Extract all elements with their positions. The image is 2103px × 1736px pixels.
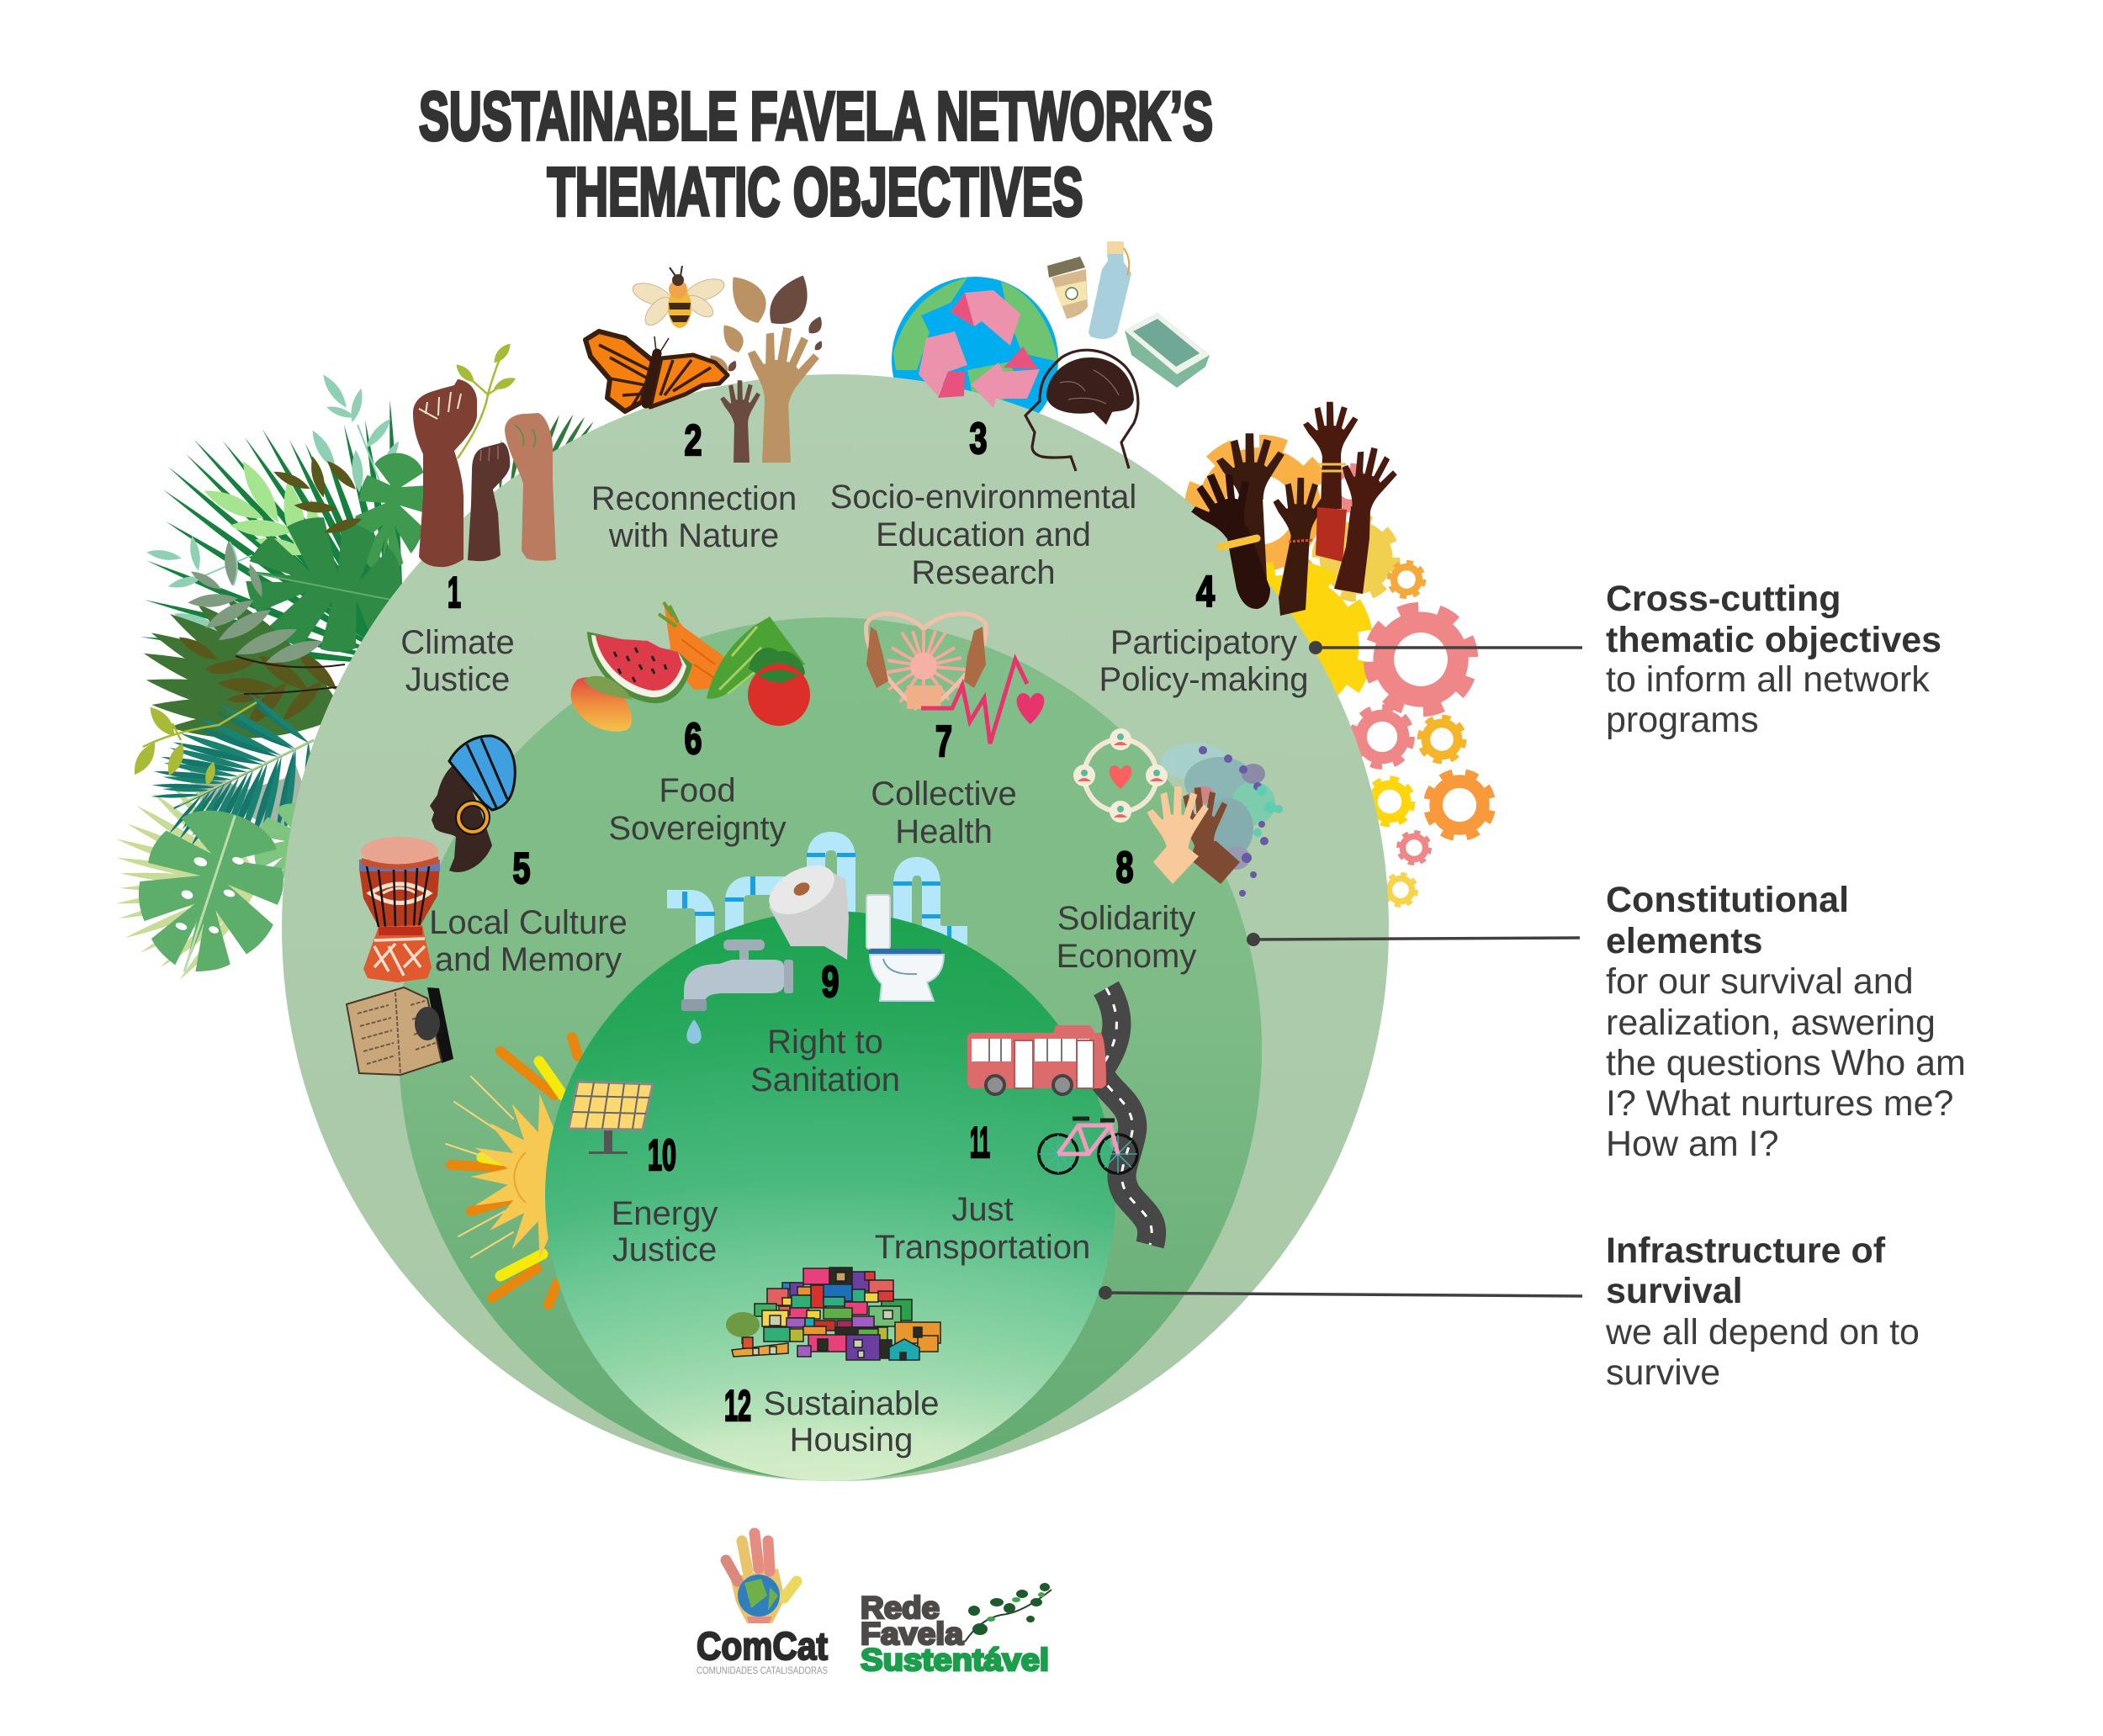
icon: raised fists — [413, 341, 556, 567]
icon: raised hands of participation — [1181, 402, 1402, 616]
light green leaves — [201, 457, 320, 561]
label 7: collective health: Health — [895, 813, 993, 850]
label 6: food sovereignty — [608, 715, 787, 847]
circle: constitutional elements — [399, 617, 1262, 1480]
label 7: collective health: Collective — [871, 775, 1017, 812]
legend text: constitutional elements: realization, aswering — [1606, 1003, 1936, 1043]
logo: Rede Favela Sustentável: Sustentável — [861, 1643, 1049, 1677]
brown-olive leaves on twigs — [176, 455, 364, 733]
logo: ComCat — [697, 1533, 828, 1676]
title: THEMATIC OBJECTIVES — [547, 154, 1083, 230]
logo: ComCat: ComCat — [697, 1624, 828, 1668]
teal palm frond — [128, 675, 346, 881]
legend text: infrastructure of survival: Infrastructure of — [1606, 1231, 1886, 1271]
legend text: cross-cutting thematic objectives — [1606, 579, 1941, 740]
label 12: sustainable housing: Housing — [790, 1421, 913, 1458]
legend text: cross-cutting thematic objectives: programs — [1606, 700, 1759, 740]
icon: solar panel — [569, 1082, 653, 1154]
legend text: constitutional elements: for our survival and — [1606, 961, 1914, 1002]
icon: tropical foliage behind climate justice — [114, 372, 632, 994]
label 4: participatory policy-making: Participatory — [1110, 624, 1297, 661]
legend text: cross-cutting thematic objectives: thematic objectives — [1606, 620, 1941, 660]
legend text: constitutional elements: elements — [1606, 921, 1762, 961]
label 7: collective health: 7 — [935, 717, 952, 766]
label 2: reconnection with nature: with Nature — [608, 517, 779, 554]
grey-green leaves — [187, 541, 326, 670]
label 10: energy justice — [612, 1131, 718, 1268]
lower monstera — [118, 793, 302, 994]
label 9: right to sanitation: Right to — [767, 1024, 883, 1061]
icon: sun — [446, 1037, 596, 1305]
icon: water pipes — [667, 841, 967, 955]
icon: solidarity circle of people — [1073, 728, 1168, 823]
label 6: food sovereignty: Sovereignty — [608, 810, 787, 847]
pale teal sprigs — [146, 372, 402, 637]
label 11: just transportation: Just — [951, 1191, 1014, 1228]
right frond — [473, 392, 632, 542]
label 2: reconnection with nature: Reconnection — [591, 480, 797, 517]
label 1: climate justice: 1 — [448, 569, 461, 617]
icon: colourful favela houses — [726, 1268, 940, 1360]
pale palm fan — [114, 768, 265, 983]
label 5: local culture and memory — [429, 844, 628, 978]
legend text: constitutional elements — [1606, 880, 1966, 1164]
olive sprig — [129, 702, 257, 787]
circle: cross-cutting thematic objectives — [282, 374, 1389, 1481]
label 9: right to sanitation: 9 — [821, 958, 840, 1007]
label 9: right to sanitation — [750, 958, 900, 1098]
grey blob behind teal frond — [189, 767, 286, 833]
legend text: constitutional elements: I? What nurtures me? — [1606, 1083, 1953, 1124]
logo: Rede Favela Sustentável: Favela — [861, 1617, 963, 1651]
label 1: climate justice: Justice — [405, 661, 510, 698]
label 4: participatory policy-making: 4 — [1196, 568, 1215, 617]
icon: water bottle — [1089, 241, 1131, 339]
legend text: constitutional elements: Constitutional — [1606, 880, 1849, 920]
label 10: energy justice: Justice — [612, 1231, 717, 1268]
label 8: solidarity economy: 8 — [1115, 844, 1134, 892]
icon: leaves and tan hand tree — [708, 275, 826, 410]
label 11: just transportation — [875, 1119, 1090, 1266]
icon: djembe drum — [359, 837, 440, 982]
icon: caring hands around heart — [866, 614, 1044, 744]
icon: hands growing like trees — [720, 322, 824, 463]
label 12: sustainable housing: Sustainable — [763, 1385, 940, 1422]
leader line: infrastructure — [1099, 1286, 1582, 1299]
logo: Rede Favela Sustentável — [861, 1583, 1052, 1677]
label 5: local culture and memory: and Memory — [435, 941, 622, 978]
label 11: just transportation: 11 — [970, 1119, 990, 1167]
legend text: infrastructure of survival: survive — [1606, 1352, 1720, 1393]
label 3: socio-environmental education and research: 3 — [969, 415, 988, 463]
icon: recycling arrows — [919, 290, 1040, 408]
legend text: infrastructure of survival — [1605, 1231, 1920, 1393]
leader line: constitutional — [1247, 933, 1580, 946]
icon: lunchbox — [1125, 313, 1210, 388]
legend text: infrastructure of survival: survival — [1606, 1271, 1743, 1311]
icon: head with brain — [1025, 350, 1138, 471]
label 3: socio-environmental education and research: Research — [911, 554, 1056, 591]
label 8: solidarity economy — [1057, 844, 1196, 975]
icon: bee — [630, 266, 727, 330]
label 2: reconnection with nature — [591, 416, 797, 554]
label 8: solidarity economy: Economy — [1057, 938, 1196, 975]
olive fronds — [139, 588, 353, 744]
title — [419, 78, 1213, 230]
label 4: participatory policy-making — [1099, 568, 1308, 698]
dark green palm needles — [140, 400, 407, 669]
label 6: food sovereignty: 6 — [685, 715, 702, 764]
icon: woman with turban — [430, 736, 515, 872]
legend text: cross-cutting thematic objectives: to inform all network — [1606, 659, 1930, 700]
label 2: reconnection with nature: 2 — [685, 416, 702, 465]
label 8: solidarity economy: Solidarity — [1057, 900, 1195, 937]
label 10: energy justice: Energy — [612, 1195, 718, 1232]
icon: butterfly — [585, 331, 728, 411]
label 11: just transportation: Transportation — [875, 1229, 1090, 1266]
label 9: right to sanitation: Sanitation — [750, 1061, 900, 1098]
icon: high five with paint splash — [1146, 743, 1283, 897]
icon: bus — [967, 1025, 1106, 1094]
legend text: constitutional elements: How am I? — [1606, 1124, 1779, 1164]
legend text: infrastructure of survival: we all depend on to — [1605, 1312, 1920, 1352]
logo: Rede Favela Sustentável: Rede — [861, 1590, 940, 1625]
legend text: constitutional elements: the questions Who am — [1606, 1043, 1966, 1083]
icon: bicycle — [1039, 1119, 1137, 1173]
label 12: sustainable housing — [724, 1382, 940, 1458]
label 10: energy justice: 10 — [648, 1131, 676, 1180]
logo: ComCat: COMUNIDADES CATALISADORAS — [697, 1666, 828, 1676]
label 7: collective health — [871, 717, 1017, 850]
secondary pale leaf — [244, 796, 336, 905]
icon: fruits and vegetables — [570, 602, 810, 732]
label 5: local culture and memory: 5 — [513, 844, 530, 893]
label 1: climate justice — [400, 569, 515, 698]
label 3: socio-environmental education and research — [830, 415, 1136, 591]
label 6: food sovereignty: Food — [659, 772, 736, 809]
label 3: socio-environmental education and research: Socio-environmental — [830, 479, 1136, 516]
label 5: local culture and memory: Local Culture — [429, 904, 628, 941]
label 12: sustainable housing: 12 — [724, 1382, 751, 1431]
circle: infrastructure of survival — [545, 911, 1115, 1481]
label 4: participatory policy-making: Policy-making — [1099, 661, 1308, 698]
monstera leaves — [346, 447, 436, 582]
icon: globe (behind the circle) — [892, 277, 1058, 443]
icon: winding road — [1099, 988, 1152, 1245]
label 3: socio-environmental education and research: Education and — [876, 516, 1091, 553]
icon: toilet paper — [761, 855, 849, 960]
leader line: cross-cutting — [1309, 641, 1582, 654]
title: SUSTAINABLE FAVELA NETWORK’S — [419, 78, 1213, 155]
icon: water faucet — [681, 939, 793, 1044]
icon: toilet — [866, 895, 944, 1001]
icon: reusable coffee cup — [1047, 257, 1088, 319]
legend text: cross-cutting thematic objectives: Cross-cutting — [1606, 579, 1841, 619]
icon: recycled gears behind participatory policy — [1191, 442, 1497, 906]
label 1: climate justice: Climate — [400, 624, 515, 661]
icon: old book — [347, 987, 453, 1075]
